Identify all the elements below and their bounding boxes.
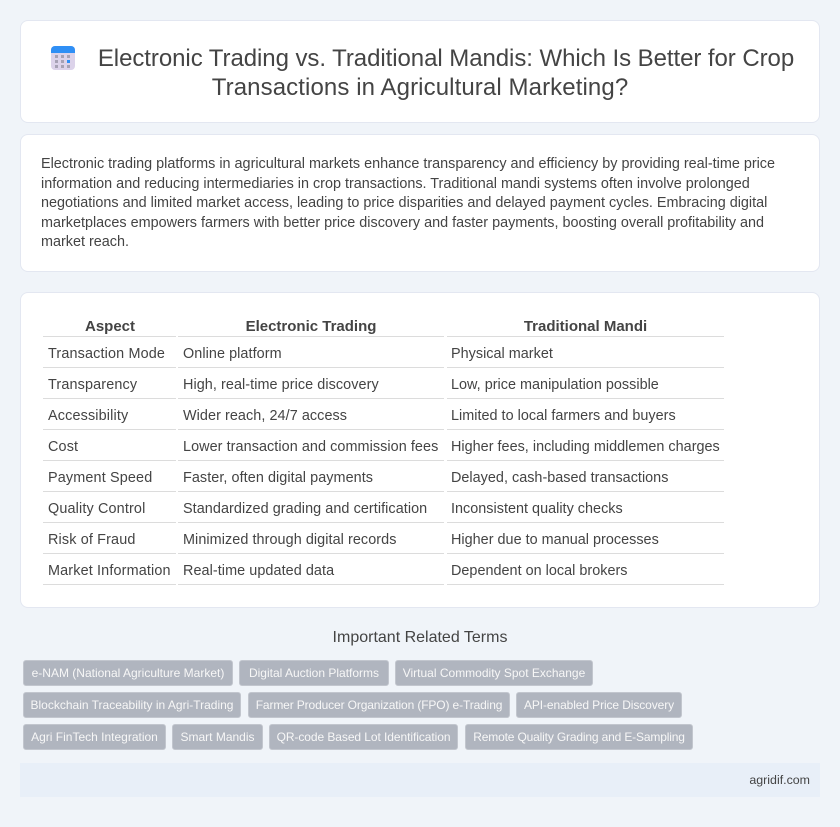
- row: transaction mode: Online platform: [183, 346, 282, 362]
- row: cost: Cost: [48, 439, 78, 455]
- row: transparency: High, real-time price discovery: [183, 377, 379, 393]
- row: payment speed: [48, 470, 668, 486]
- row: accessibility: Accessibility: [48, 408, 128, 424]
- row: quality control: Standardized grading and certification: [183, 501, 427, 517]
- intro paragraph: marketplaces empowers farmers with better price discovery and faster payments, boosting overall profitability and: [41, 215, 764, 231]
- row: transparency: [48, 377, 659, 393]
- related term tags: Farmer Producer Organization (FPO) e-Trading: [256, 698, 502, 712]
- row: accessibility: Wider reach, 24/7 access: [183, 408, 347, 424]
- row: payment speed: Faster, often digital payments: [183, 470, 373, 486]
- row: market information: Real-time updated data: [183, 563, 334, 579]
- related term tags: Remote Quality Grading and E-Sampling: [473, 730, 685, 744]
- row: payment speed: Payment Speed: [48, 470, 152, 486]
- related term tags: Agri FinTech Integration: [31, 730, 158, 744]
- intro paragraph: market reach.: [41, 234, 129, 250]
- row: market information: [48, 563, 628, 579]
- row: cost: [48, 439, 720, 455]
- row: market information: Market Information: [48, 563, 171, 579]
- table header: Traditional Mandi: [524, 318, 647, 335]
- row: risk of fraud: [48, 532, 659, 548]
- row: transparency: Low, price manipulation possible: [451, 377, 659, 393]
- row: risk of fraud: Higher due to manual processes: [451, 532, 659, 548]
- comparison table panel: [20, 292, 820, 608]
- table header: [85, 318, 647, 335]
- row: accessibility: Limited to local farmers and buyers: [451, 408, 676, 424]
- row: accessibility: [48, 408, 676, 424]
- icon: calendar: [51, 46, 75, 70]
- related term tags: Blockchain Traceability in Agri-Trading: [30, 698, 233, 712]
- header panel: [20, 20, 820, 123]
- row: quality control: Quality Control: [48, 501, 145, 517]
- title: Electronic Trading vs. Traditional Mandis: Which Is Better for Crop: [98, 45, 794, 72]
- row: transaction mode: Physical market: [451, 346, 553, 362]
- related term tags: QR-code Based Lot Identification: [277, 730, 450, 744]
- row: quality control: [48, 501, 623, 517]
- row: risk of fraud: Risk of Fraud: [48, 532, 136, 548]
- row: cost: Lower transaction and commission fees: [183, 439, 438, 455]
- related term tags: Digital Auction Platforms: [249, 666, 379, 680]
- intro paragraph: [41, 156, 775, 250]
- intro paragraph: negotiations and limited market access, leading to price disparities and delayed payment cycles. Embracing digital: [41, 195, 767, 211]
- intro paragraph: information and reducing intermediaries in crop transactions. Traditional mandi systems often involve prolonged: [41, 176, 750, 192]
- row: transaction mode: [48, 346, 553, 362]
- title: [98, 45, 794, 101]
- title: Transactions in Agricultural Marketing?: [212, 74, 628, 101]
- row: risk of fraud: Minimized through digital records: [183, 532, 396, 548]
- related term tags: Virtual Commodity Spot Exchange: [403, 666, 585, 680]
- intro paragraph: Electronic trading platforms in agricultural markets enhance transparency and efficiency by providing real-time price: [41, 156, 775, 172]
- row: market information: Dependent on local brokers: [451, 563, 628, 579]
- footer bar: [20, 763, 820, 797]
- related terms heading: Important Related Terms: [333, 629, 507, 646]
- related term tags: API-enabled Price Discovery: [524, 698, 674, 712]
- intro text panel: [20, 134, 820, 272]
- footer source: agridif.com: [749, 773, 810, 787]
- table header: Aspect: [85, 318, 135, 335]
- row: payment speed: Delayed, cash-based transactions: [451, 470, 668, 486]
- related term tags: Smart Mandis: [180, 730, 255, 744]
- table header: Electronic Trading: [246, 318, 376, 335]
- row: transparency: Transparency: [48, 377, 137, 393]
- row: cost: Higher fees, including middlemen charges: [451, 439, 720, 455]
- row: quality control: Inconsistent quality checks: [451, 501, 623, 517]
- row: transaction mode: Transaction Mode: [48, 346, 165, 362]
- comparison table: [43, 318, 724, 585]
- related term tags: e-NAM (National Agriculture Market): [32, 666, 224, 680]
